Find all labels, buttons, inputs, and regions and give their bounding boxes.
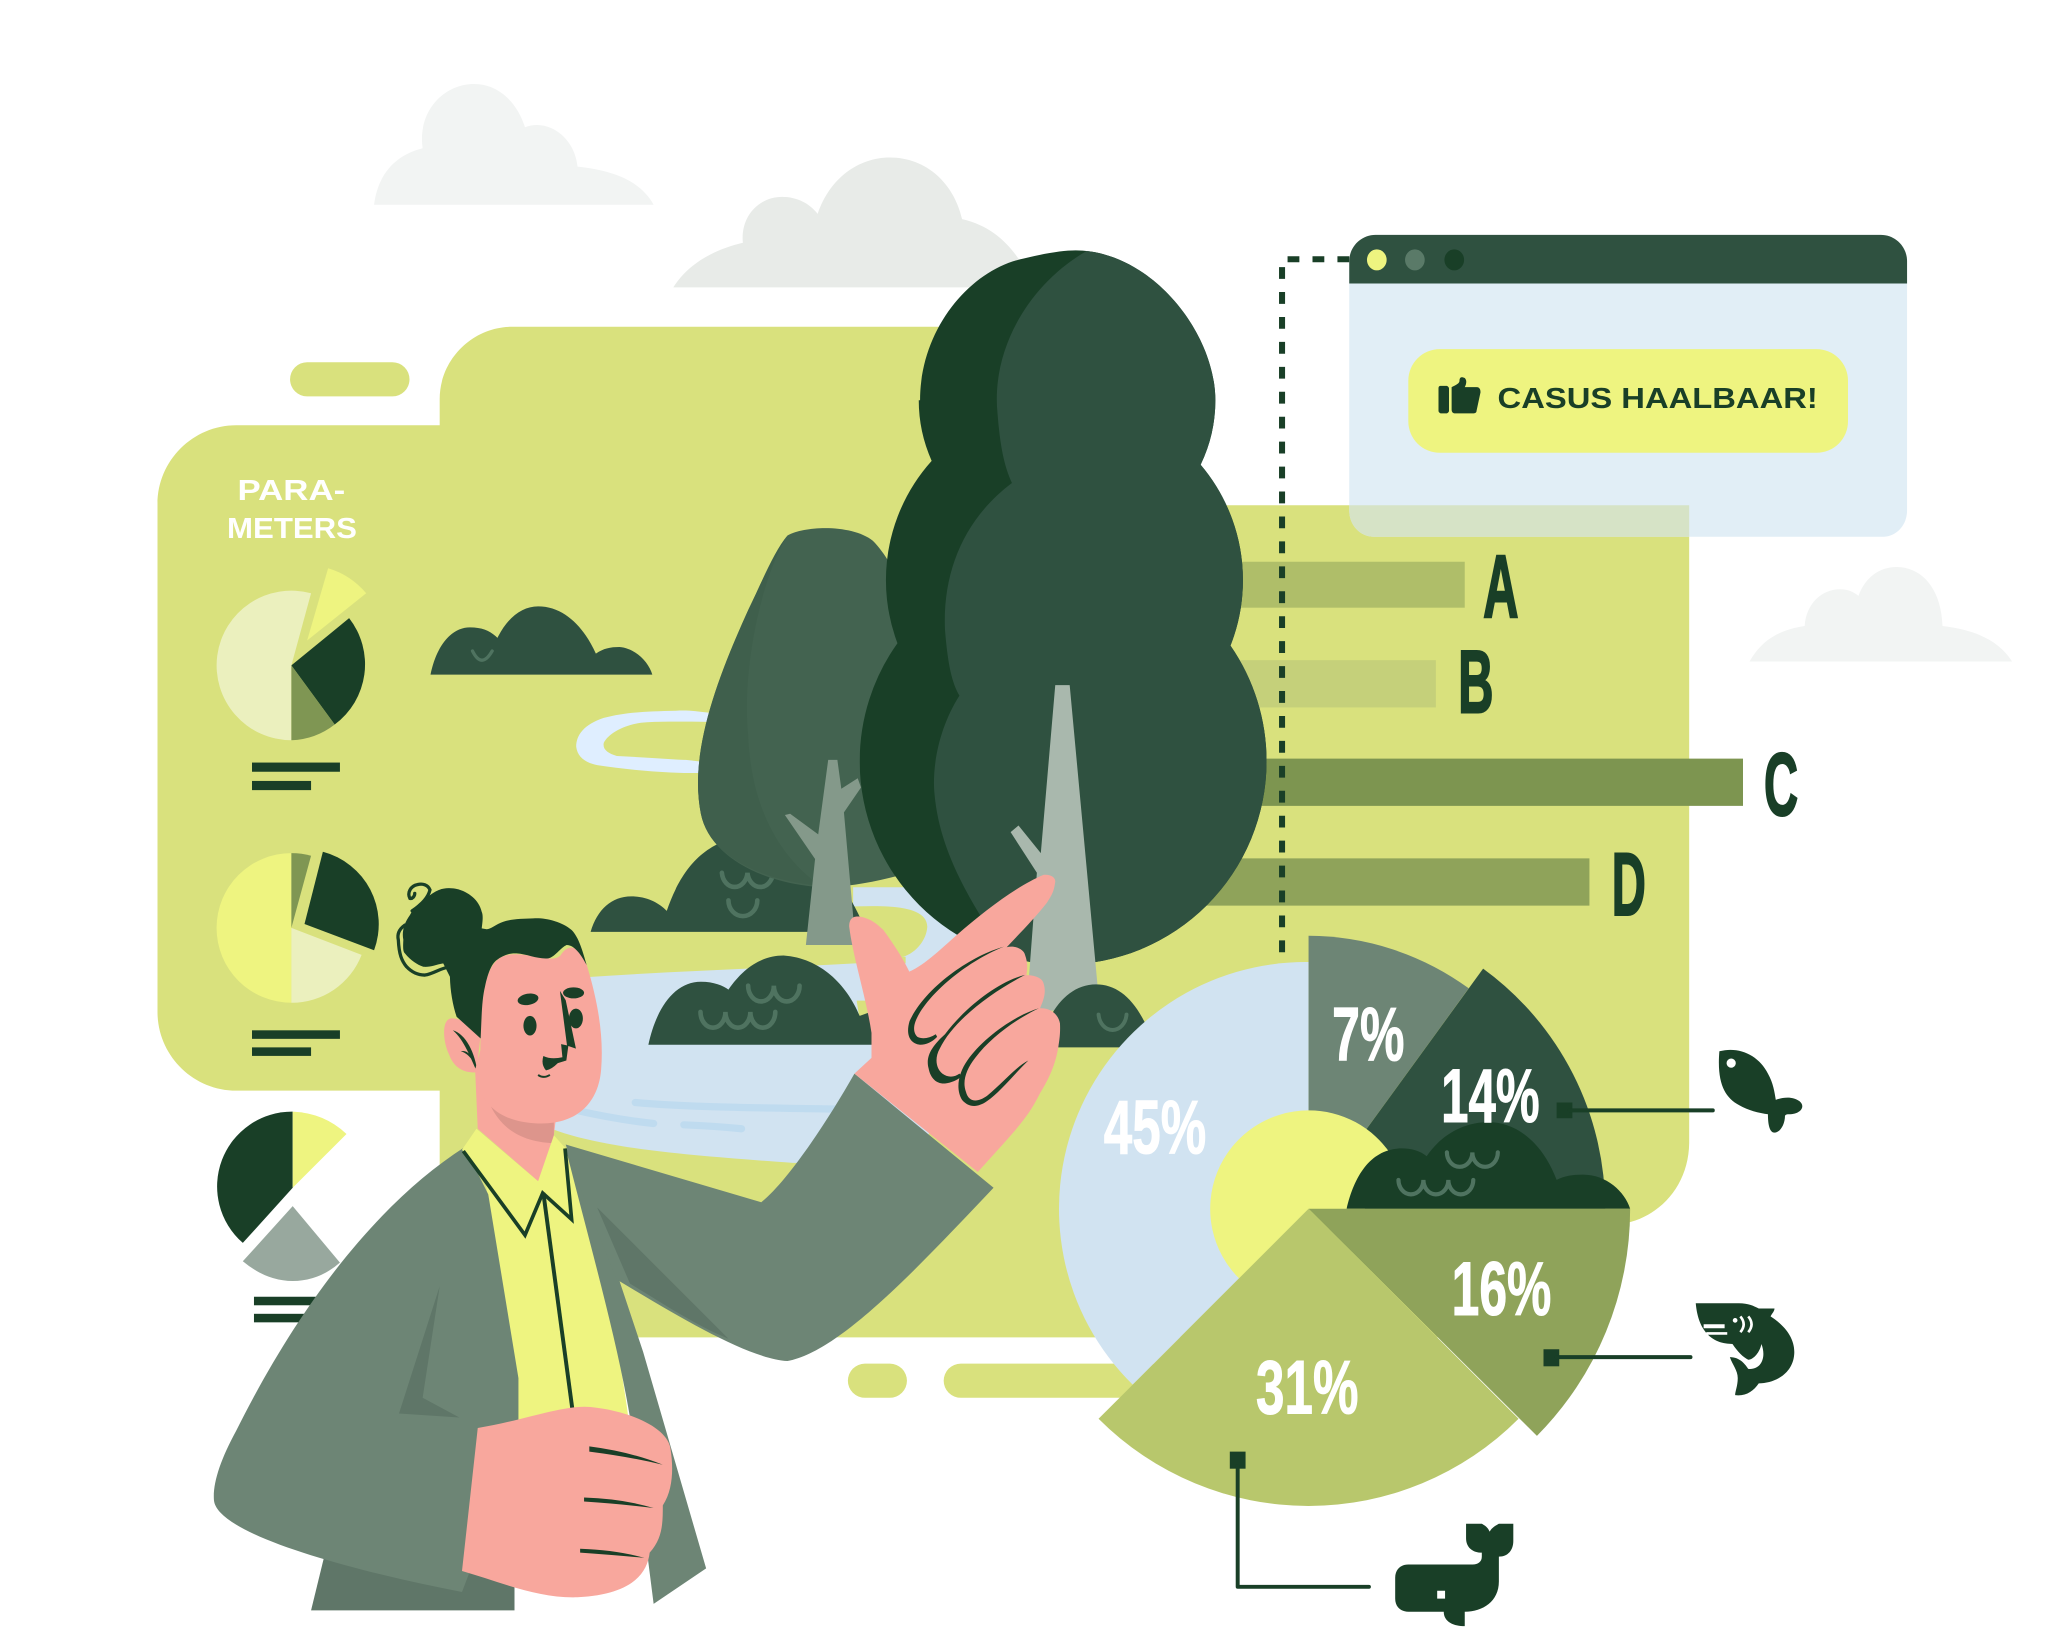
finger line 3 [958,1008,1039,1106]
coat: fold [399,1286,459,1417]
panel: main green background [158,327,1689,1337]
hair strand [398,925,448,975]
hair [403,888,587,1038]
slice 7% [1309,936,1469,1209]
bar C [1181,759,1743,806]
pill: bottom short [848,1364,907,1398]
pill: bottom long [944,1364,1167,1398]
heading: parameters: PARA- [238,475,345,507]
value 16%: 16% [1452,1247,1551,1332]
bush: right of hand [1050,984,1155,1047]
label A: A [1483,536,1519,636]
lake [551,887,971,1163]
arm [566,1074,994,1361]
browser dots [1367,249,1464,270]
label B: B [1458,632,1494,732]
cloud: top centre [673,157,1021,287]
label C: C [1764,734,1798,834]
eyebrow left [517,992,539,1007]
pie chart 2 [217,852,379,1056]
value 45%: 45% [1104,1086,1206,1171]
bar B [1181,660,1436,707]
icon: thumbs up [1438,377,1480,413]
pill: top left [290,362,410,396]
slice 16% [1309,1209,1630,1436]
heading: parameters: METERS [227,513,357,545]
hair curl [409,884,430,911]
bush: middle behind trees [591,836,866,932]
arm shade [597,1207,728,1339]
heading: parameters [227,475,357,545]
person: presenter [214,875,1060,1610]
bar D [1181,858,1589,906]
cloud: top left [374,84,654,205]
callout text: CASUS HAALBAAR! [1498,383,1818,415]
fist hand [462,1407,672,1597]
neck shadow [491,1106,554,1143]
icon: fish [1719,1050,1802,1133]
eye left [523,1016,537,1036]
bar A [1181,562,1465,608]
river: upper ribbon [576,711,709,773]
lower lip [538,1075,550,1077]
neck [475,1070,558,1181]
trunk: back tree [785,760,861,945]
bush: lake [648,955,874,1045]
collar outline [463,1148,572,1235]
pointing hand [849,875,1060,1172]
bars: horizontal chart [1181,536,1798,934]
value 14%: 14% [1441,1054,1540,1139]
eyebrow right [563,987,584,998]
fist lines [580,1446,663,1558]
browser title bar [1349,235,1907,283]
bush on pie [1347,1122,1630,1209]
slice 14% [1309,969,1605,1209]
trunk: large tree [1011,685,1100,1011]
finger line 1 [908,947,1004,1045]
nose and mouth [543,991,576,1070]
coat: lower shade [311,1557,515,1610]
icon: shark [1696,1303,1794,1395]
eye right [569,1009,583,1028]
coat: right lapel [566,1148,706,1604]
pie chart 1 [217,568,366,790]
finger line 2 [928,975,1025,1084]
shirt placket [543,1193,572,1408]
ear [444,1018,480,1074]
browser window [1349,235,1907,537]
icon: whale [1395,1524,1513,1626]
callout: casus haalbaar [1408,349,1848,453]
slice inner circle [1210,1110,1391,1280]
value 31%: 31% [1256,1346,1358,1431]
label D: D [1612,834,1646,934]
shirt [486,1148,630,1431]
coat: left side [214,1147,518,1592]
tree: large foreground [860,250,1266,1011]
connector: 16% to shark [1543,1349,1690,1366]
shirt collar [462,1129,572,1235]
cloud: right [1750,567,2012,661]
green island [840,906,927,962]
slice 31% [1099,1209,1519,1506]
face [475,948,602,1124]
value 7%: 7% [1332,992,1404,1077]
pie chart: main [1059,936,1630,1506]
connector: 31% to whale [1230,1452,1369,1587]
slice 45% [1059,962,1309,1385]
dashed connector: browser to chart [1282,259,1349,1008]
bush: top left [431,606,652,675]
pie chart 3 [217,1112,347,1322]
connector: 14% to fish [1557,1102,1713,1118]
tree: back [698,528,932,945]
